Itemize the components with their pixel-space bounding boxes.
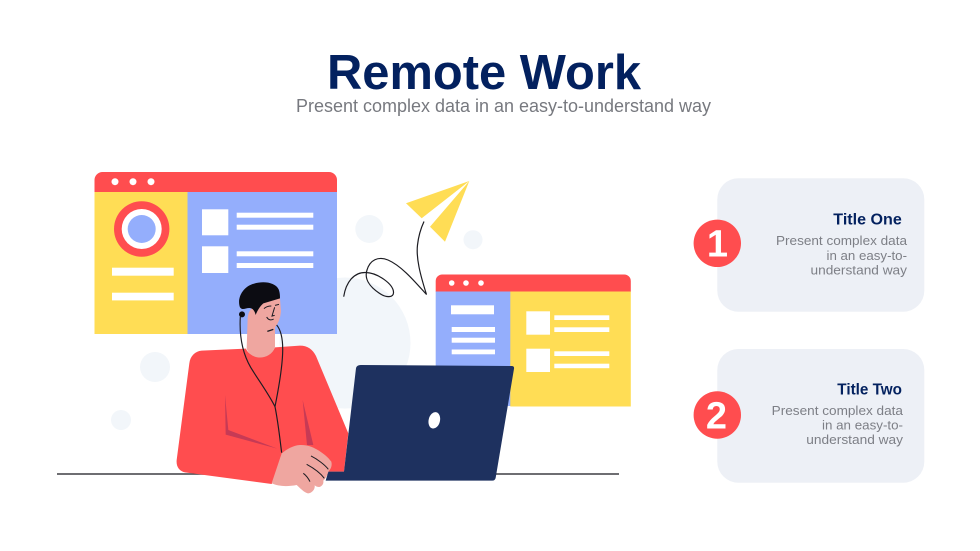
head and neck xyxy=(247,298,281,357)
face features xyxy=(264,304,279,331)
title: Remote Work xyxy=(327,46,642,100)
text block one: understand way xyxy=(810,263,908,277)
subtitle: Present complex data in an easy-to-understand way xyxy=(296,96,711,116)
person xyxy=(177,282,514,493)
panel: title one xyxy=(694,178,924,312)
earphone wires xyxy=(240,317,283,453)
hair xyxy=(239,282,280,315)
number badge 1 xyxy=(694,220,741,267)
text block two: in an easy-to- xyxy=(822,419,903,433)
finger lines xyxy=(303,456,328,482)
laptop logo xyxy=(427,411,442,430)
text block two: understand way xyxy=(806,433,904,447)
hand xyxy=(272,445,332,493)
text block one: in an easy-to- xyxy=(826,249,907,263)
earbud xyxy=(239,311,245,317)
icon: paper plane xyxy=(406,181,469,242)
panel: title two xyxy=(694,349,924,483)
small browser window xyxy=(436,274,631,406)
number badge 1: 1 xyxy=(707,224,728,266)
heading: title two: Title Two xyxy=(837,381,902,398)
number badge 2: 2 xyxy=(706,396,727,438)
text block two: Present complex data xyxy=(772,404,904,418)
desk line xyxy=(57,473,619,475)
laptop xyxy=(326,365,514,481)
background decorative circles xyxy=(111,215,482,430)
sweater folds xyxy=(225,395,313,449)
text block one: Present complex data xyxy=(776,234,908,248)
text block one xyxy=(776,234,908,277)
number badge 2 xyxy=(694,391,741,439)
large browser window xyxy=(94,172,337,334)
arrow: flight squiggle xyxy=(344,222,426,297)
sweater xyxy=(177,346,348,484)
heading: title one: Title One xyxy=(833,212,902,228)
text block two xyxy=(772,404,904,447)
